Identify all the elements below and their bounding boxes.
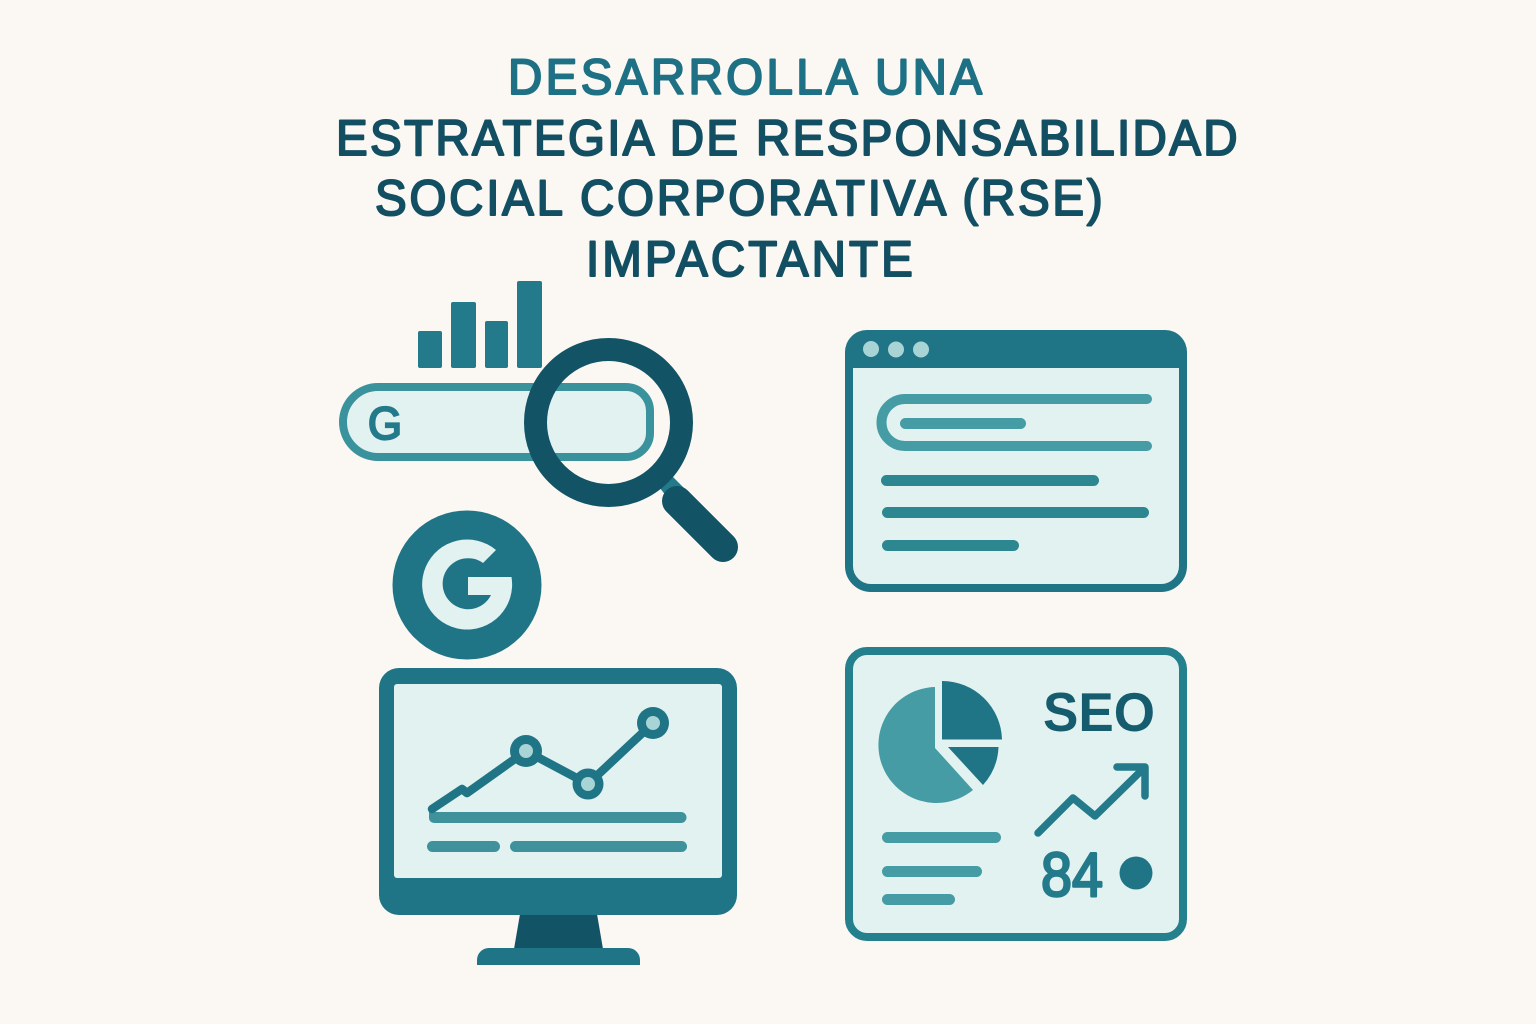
chart baseline (429, 808, 686, 823)
browser header (845, 330, 1187, 368)
card text lines (882, 832, 1001, 905)
search bar G letter: G (368, 398, 402, 449)
icon: bar chart (418, 281, 542, 368)
title line 3: SOCIAL CORPORATIVA (RSE) (375, 171, 1103, 226)
title line 4: IMPACTANTE (586, 232, 913, 287)
browser text lines (881, 418, 1149, 551)
icon: desktop monitor with line chart (379, 668, 737, 965)
monitor stand (514, 914, 603, 949)
browser frame (849, 334, 1183, 588)
monitor body (379, 668, 737, 915)
card frame (849, 651, 1183, 937)
title line 2: ESTRATEGIA DE RESPONSABILIDAD (336, 111, 1238, 166)
title line 1: DESARROLLA UNA (508, 50, 983, 105)
monitor screen (394, 684, 722, 878)
score number: 84 (1041, 841, 1103, 910)
SEO label: SEO (1043, 681, 1155, 743)
icon: magnifying glass (536, 350, 723, 547)
panel: browser window (845, 330, 1187, 588)
score dot (1120, 856, 1152, 890)
title (336, 50, 1238, 287)
panel: SEO report card (849, 651, 1183, 937)
icon: Google G badge (392, 510, 542, 660)
trend arrow (1038, 767, 1145, 833)
monitor base (477, 948, 640, 965)
browser rounded bracket (881, 399, 1147, 446)
browser window dots (863, 341, 929, 358)
monitor text lines (427, 841, 687, 852)
icon: search bar (343, 387, 650, 457)
pie chart (878, 681, 1002, 803)
line chart (432, 707, 669, 809)
